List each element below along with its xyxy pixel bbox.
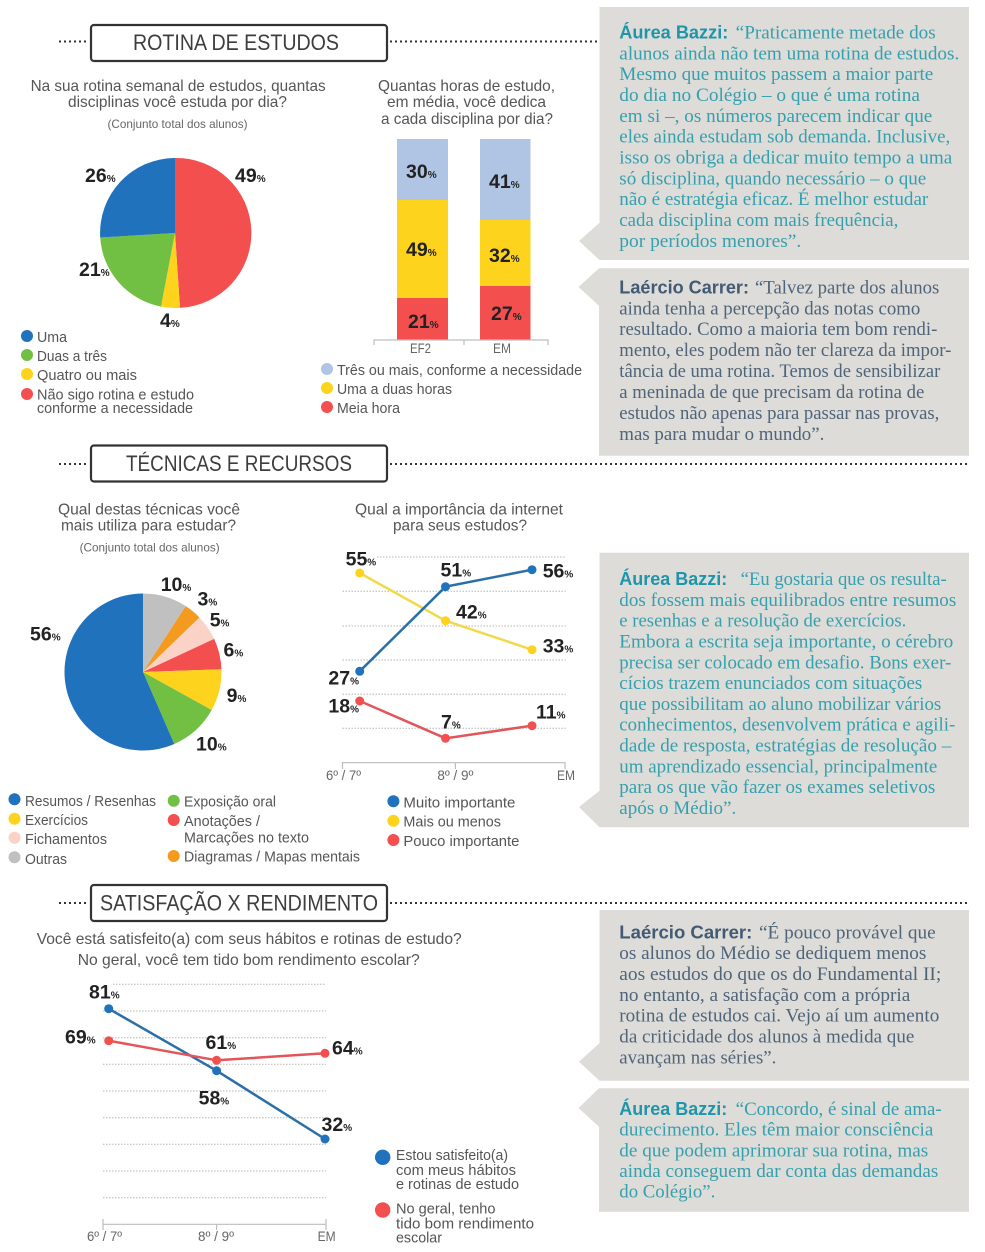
legend: satisfação e rendimento: escolar [396,1229,442,1246]
quote panel: Laércio Carrer, rotina: a meninada de que precisam da rotina de [619,383,924,403]
quote panel: Áurea Bazzi, rotina: não é estratégia eficaz. É melhor estudar [619,188,928,210]
quote panel: Áurea Bazzi, rotina: do dia no Colégio – o que é uma rotina [619,86,920,106]
legend: técnicas de estudo [8,793,360,868]
line chart: importância da internet: 42% [456,601,487,623]
line chart: importância da internet: 55% [346,548,376,570]
legend: disciplinas por dia: Não sigo rotina e estudo [37,386,194,404]
quote panel: Laércio Carrer, rotina: estudos não apenas para passar nas provas, [619,404,939,424]
quote panel: Áurea Bazzi, técnicas: e resenhas e a resolução de exercícios. [619,612,906,632]
quote panel: Áurea Bazzi, rotina: em si –, os números parecem indicar que [619,107,932,127]
pie chart: técnicas de estudo: 6% [224,640,243,662]
line chart: importância da internet: 33% [543,636,573,658]
question: disciplinas por dia: Na sua rotina semanal de estudos, quantas [31,78,326,95]
quote panel: Áurea Bazzi, satisfação: ainda conseguem dar conta das demandas [619,1162,938,1182]
legend: satisfação e rendimento: Estou satisfeito(a) [396,1147,508,1164]
quote panel: Áurea Bazzi, técnicas: precisa ser colocado em desafio. Bons exer- [619,653,951,673]
legend: satisfação e rendimento: com meus hábitos [396,1162,516,1179]
stacked bar chart: horas por disciplina: 30% [406,161,437,183]
line chart: importância da internet: 18% [328,695,359,717]
pie chart: disciplinas por dia [79,158,266,332]
line chart: satisfação e rendimento: 81% [89,981,120,1003]
quote panel: Áurea Bazzi, satisfação: Áurea Bazzi: [619,1098,727,1119]
legend: técnicas de estudo: Anotações / [184,813,261,830]
quote panel: Áurea Bazzi, técnicas: dade de resposta, estratégias de resolução – [619,736,952,756]
quote panel: Áurea Bazzi, técnicas: cícios trazem enunciados com situações [619,674,922,694]
quote panel: Áurea Bazzi, técnicas [579,553,969,827]
legend: satisfação e rendimento: No geral, tenho [396,1200,496,1217]
line chart: satisfação e rendimento: 58% [199,1087,229,1109]
question: importância da internet [355,502,564,535]
legend: importância da internet [387,794,519,850]
question: horas por disciplina: Quantas horas de estudo, [378,78,555,95]
line chart: importância da internet: 56% [543,560,573,582]
legend: técnicas de estudo: Exercícios [25,812,88,829]
quote panel: Laércio Carrer, rotina: Laércio Carrer: [619,277,749,297]
quote panel: Áurea Bazzi, rotina: isso os obriga a dedicar muito tempo a uma [619,148,952,168]
quote panel: Áurea Bazzi, rotina: eles ainda estudam sob demanda. Inclusive, [619,128,950,148]
legend: satisfação e rendimento: tido bom rendimento [396,1215,534,1232]
question: horas por disciplina: a cada disciplina por dia? [381,111,553,128]
question: horas por disciplina: em média, você dedica [387,94,546,111]
legend: horas por disciplina: Três ou mais, conforme a necessidade [337,362,582,379]
question: horas por disciplina [378,78,555,128]
pie chart: disciplinas por dia: 49% [235,165,266,187]
line chart: satisfação e rendimento: 32% [322,1114,352,1136]
section header: técnicas e recursos [59,446,969,482]
legend: importância da internet: Muito importante [403,794,515,811]
line chart: importância da internet: 11% [536,701,566,723]
quote panel: Áurea Bazzi, satisfação: “Concordo, é sinal de ama- [736,1100,942,1120]
quote panel: Laércio Carrer, satisfação [579,910,969,1081]
legend: técnicas de estudo: Resumos / Resenhas [25,793,156,810]
quote panel: Laércio Carrer, rotina: “Talvez parte dos alunos [755,278,939,298]
quote panel: Áurea Bazzi, rotina: Mesmo que muitos passem a maior parte [619,65,933,85]
quote panel: Laércio Carrer, rotina: tância de uma rotina. Temos de sensibilizar [619,362,940,382]
quote panel: Áurea Bazzi, técnicas: Embora a escrita seja importante, o cérebro [619,632,953,652]
line chart: importância da internet: 8º / 9º [437,767,473,783]
line chart: importância da internet: EM [557,767,575,783]
stacked bar chart: horas por disciplina: 27% [491,303,522,325]
pie chart: disciplinas por dia: 21% [79,259,110,281]
stacked bar chart: horas por disciplina: 32% [489,245,520,267]
question: disciplinas por dia [31,78,326,131]
quote panel: Áurea Bazzi, rotina: “Praticamente metade dos [736,24,936,44]
quote panel: Laércio Carrer, rotina: mento, eles podem não ter clareza da impor- [619,341,951,361]
quote panel: Áurea Bazzi, satisfação: de que podem aprimorar sua rotina, mas [619,1141,928,1161]
question: disciplinas por dia: (Conjunto total dos alunos) [108,117,248,131]
quote panel: Áurea Bazzi, satisfação [578,1088,969,1212]
legend: disciplinas por dia: Uma [37,329,68,346]
line chart: importância da internet: 7% [441,712,461,734]
section header: rotina de estudos: ROTINA DE ESTUDOS [133,30,339,55]
quote panel: Laércio Carrer, satisfação: da criticidade dos alunos à medida que [619,1028,914,1048]
stacked bar chart: horas por disciplina: EF2 [410,340,431,356]
pie chart: técnicas de estudo: 10% [161,574,191,596]
line chart: importância da internet: 6º / 7º [326,767,361,783]
line chart: satisfação e rendimento: 69% [65,1026,96,1048]
pie chart: técnicas de estudo [30,574,246,756]
line chart: satisfação e rendimento: 8º / 9º [198,1228,234,1244]
pie chart: disciplinas por dia: 4% [160,310,180,332]
legend: satisfação e rendimento: e rotinas de estudo [396,1176,519,1193]
legend: disciplinas por dia: Quatro ou mais [37,367,137,384]
question: técnicas de estudo: (Conjunto total dos alunos) [80,541,220,555]
quote panel: Laércio Carrer, rotina: resultado. Como a maioria tem bom rendi- [619,320,937,340]
quote panel: Áurea Bazzi, satisfação: do Colégio”. [619,1183,715,1203]
quote panel: Áurea Bazzi, rotina: alunos ainda não tem uma rotina de estudos. [619,44,959,64]
question: satisfação e rendimento: Você está satisfeito(a) com seus hábitos e rotinas de estudo? [37,931,462,948]
quote panel: Laércio Carrer, satisfação: aos estudos do que os do Fundamental II; [619,965,941,985]
quote panel: Áurea Bazzi, rotina: cada disciplina com mais frequência, [619,211,898,231]
question: satisfação e rendimento: No geral, você tem tido bom rendimento escolar? [78,952,420,969]
pie chart: técnicas de estudo: 5% [210,610,230,632]
quote panel: Laércio Carrer, satisfação: rotina de estudos cai. Vejo aí um aumento [619,1007,939,1027]
stacked bar chart: horas por disciplina: EM [493,340,511,356]
quote panel: Laércio Carrer, rotina: ainda tenha a percepção das notas como [619,299,920,319]
quote panel: Áurea Bazzi, rotina: por períodos menores”. [619,232,801,252]
line chart: satisfação e rendimento: EM [318,1228,336,1244]
quote panel: Laércio Carrer, satisfação: Laércio Carrer: [619,922,752,942]
stacked bar chart: horas por disciplina: 49% [406,239,437,261]
quote panel: Áurea Bazzi, técnicas: que possibilitam ao aluno mobilizar vários [619,695,941,715]
legend: horas por disciplina: Uma a duas horas [337,381,452,398]
line chart: importância da internet [326,548,575,783]
line chart: satisfação e rendimento: 61% [206,1032,236,1054]
question: disciplinas por dia: disciplinas você estuda por dia? [68,94,287,111]
pie chart: disciplinas por dia: 26% [85,165,116,187]
question: importância da internet: Qual a importância da internet [355,502,564,519]
line chart: satisfação e rendimento: 6º / 7º [87,1228,122,1244]
quote panel: Áurea Bazzi, técnicas: para os que vão fazer os exames seletivos [619,778,935,798]
pie chart: técnicas de estudo: 56% [30,624,61,646]
quote panel: Laércio Carrer, satisfação: avançam nas séries”. [619,1048,776,1068]
section header: satisfação x rendimento [59,885,969,921]
section header: satisfação x rendimento: SATISFAÇÃO X RENDIMENTO [100,891,378,916]
legend: técnicas de estudo: Fichamentos [25,831,107,848]
legend: técnicas de estudo: Exposição oral [184,794,276,811]
section header: rotina de estudos [59,25,600,61]
legend: disciplinas por dia [21,329,194,417]
legend: disciplinas por dia: Duas a três [37,348,107,365]
line chart: importância da internet: 51% [440,560,471,582]
question: técnicas de estudo: mais utiliza para estudar? [61,518,236,535]
legend: horas por disciplina: Meia hora [337,400,401,417]
quote panel: Áurea Bazzi, rotina [579,7,969,260]
legend: disciplinas por dia: conforme a necessidade [37,400,193,417]
line chart: satisfação e rendimento [65,981,363,1244]
quote panel: Áurea Bazzi, técnicas: conhecimentos, desenvolvem prática e agili- [619,716,955,736]
question: técnicas de estudo [58,502,240,555]
question: técnicas de estudo: Qual destas técnicas você [58,502,240,519]
stacked bar chart: horas por disciplina: 21% [408,311,439,333]
line chart: satisfação e rendimento: 64% [332,1038,363,1060]
quote panel: Laércio Carrer, rotina [578,268,969,456]
legend: técnicas de estudo: Outras [25,851,67,868]
quote panel: Áurea Bazzi, técnicas: um aprendizado essencial, principalmente [619,757,937,777]
stacked bar chart: horas por disciplina: 41% [489,171,520,193]
legend: satisfação e rendimento [375,1147,534,1246]
quote panel: Laércio Carrer, satisfação: os alunos do Médio se dediquem menos [619,944,926,964]
pie chart: técnicas de estudo: 3% [198,589,217,611]
pie chart: técnicas de estudo: 9% [227,685,246,707]
line chart: importância da internet: 27% [328,667,359,689]
legend: importância da internet: Pouco importante [403,833,519,850]
stacked bar chart: horas por disciplina [374,139,548,356]
quote panel: Áurea Bazzi, rotina: só disciplina, quando necessário – o que [619,169,926,189]
quote panel: Laércio Carrer, satisfação: no entanto, a satisfação com a própria [619,986,910,1006]
legend: importância da internet: Mais ou menos [403,814,501,831]
section header: técnicas e recursos: TÉCNICAS E RECURSOS [126,451,352,476]
quote panel: Laércio Carrer, rotina: mas para mudar o mundo”. [619,425,824,445]
legend: técnicas de estudo: Marcações no texto [184,830,309,847]
quote panel: Áurea Bazzi, técnicas: após o Médio”. [619,799,736,819]
quote panel: Áurea Bazzi, satisfação: durecimento. Eles têm maior consciência [619,1121,933,1141]
quote panel: Áurea Bazzi, técnicas: dos fossem mais equilibrados entre resumos [619,591,956,611]
legend: horas por disciplina [321,362,582,417]
quote panel: Laércio Carrer, satisfação: “É pouco provável que [759,921,936,943]
quote panel: Áurea Bazzi, rotina: Áurea Bazzi: [619,22,728,42]
question: importância da internet: para seus estudos? [393,518,527,535]
question: satisfação e rendimento [37,931,462,969]
quote panel: Áurea Bazzi, técnicas: “Eu gostaria que os resulta- [741,570,947,590]
pie chart: técnicas de estudo: 10% [196,734,227,756]
legend: técnicas de estudo: Diagramas / Mapas mentais [184,849,360,866]
quote panel: Áurea Bazzi, técnicas: Áurea Bazzi: [619,568,727,589]
